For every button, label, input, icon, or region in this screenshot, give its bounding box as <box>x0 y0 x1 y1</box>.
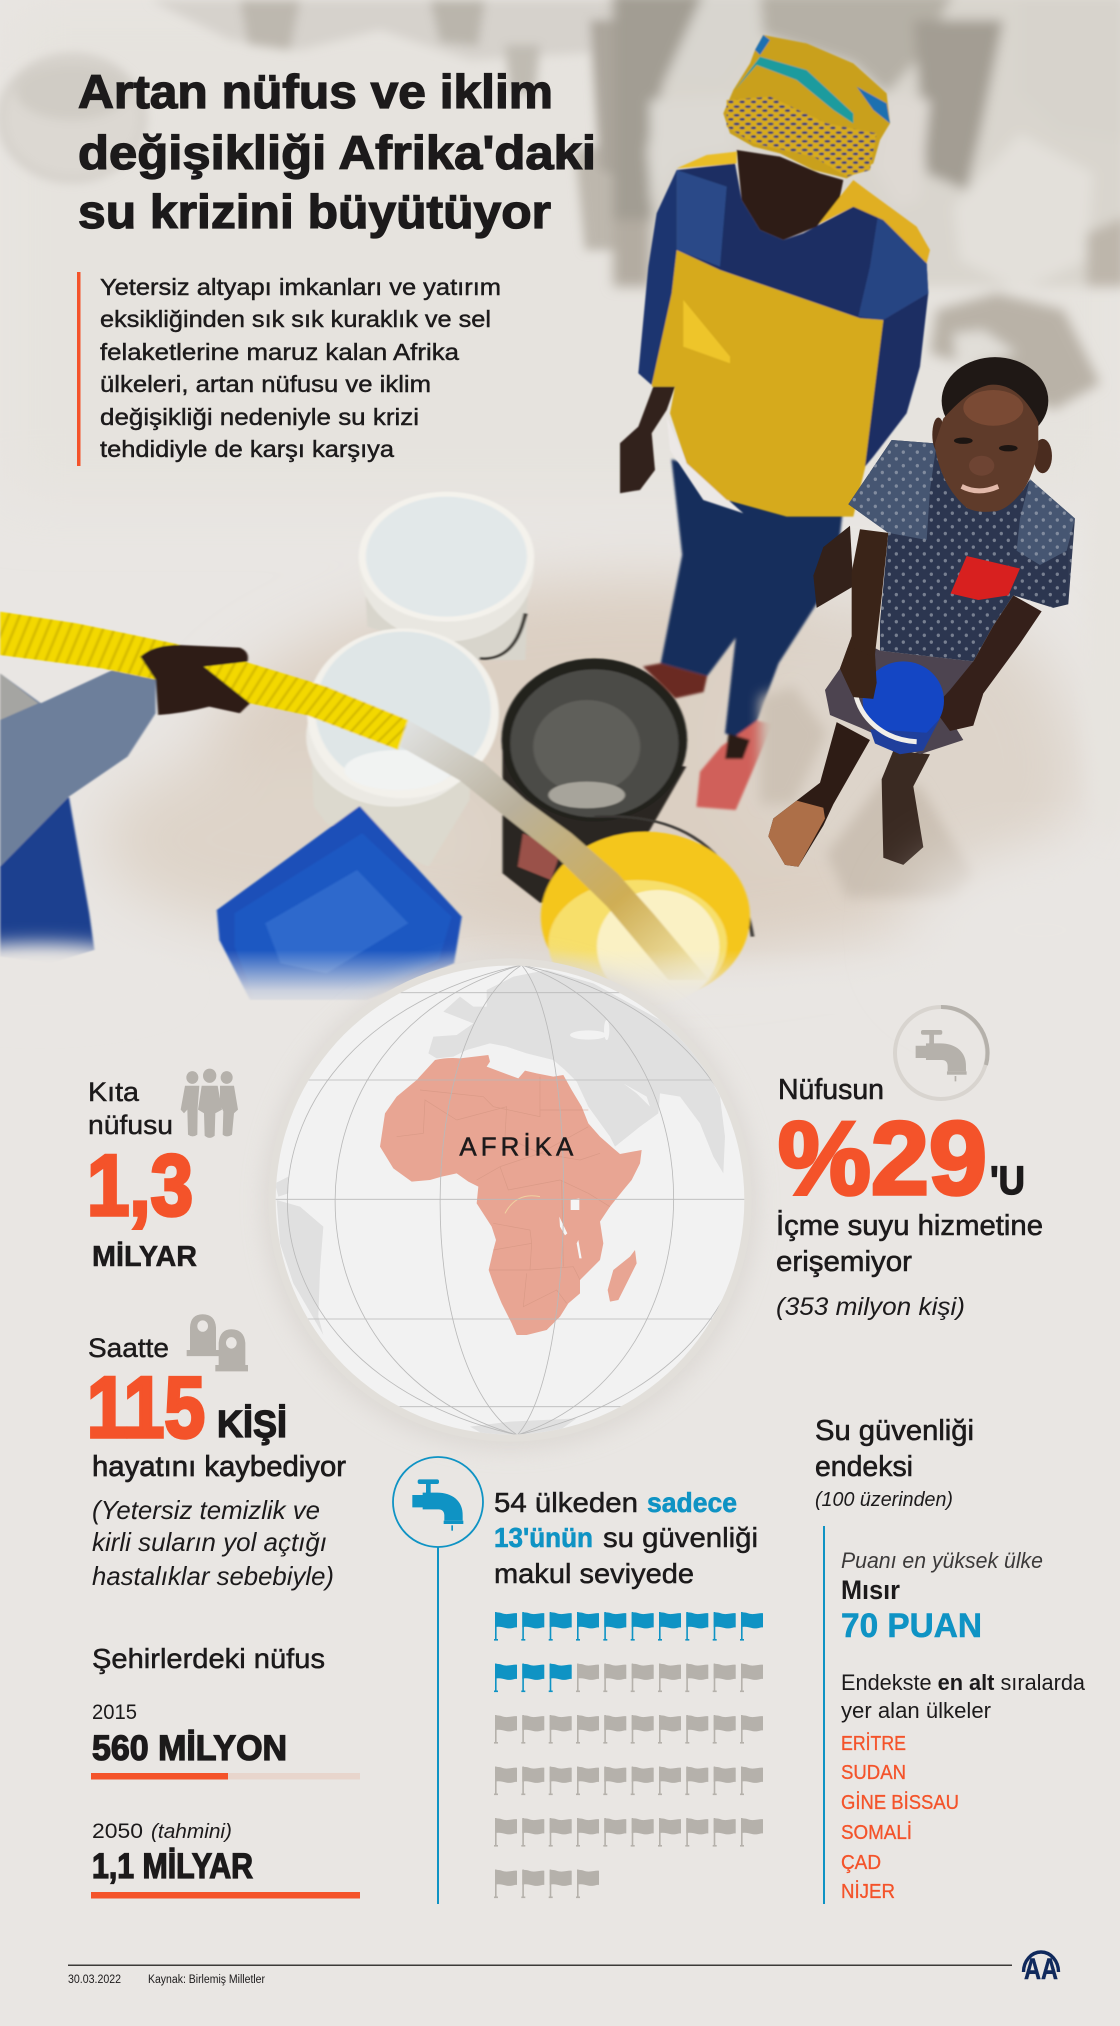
yellow bucket <box>541 816 753 1007</box>
sleeve <box>0 658 156 867</box>
list: lowest ranked countries: NİJER <box>841 1880 895 1903</box>
stat: drinking water access <box>776 1007 1043 1321</box>
woman's jeans and shoes <box>643 459 843 810</box>
left arm <box>840 529 888 699</box>
ghosted crowd, upper right <box>613 0 1120 410</box>
stat: urban population: 2015 <box>92 1701 137 1724</box>
stat: deaths per hour: KİŞİ <box>217 1404 287 1446</box>
bar: 2050 <box>91 1892 360 1898</box>
buckets, hose and man's arm <box>0 492 753 1007</box>
stat: drinking water access: %29 <box>778 1101 987 1217</box>
list: lowest ranked countries: GİNE BİSSAU <box>841 1791 959 1814</box>
globe with Africa highlighted <box>260 955 760 1452</box>
title: su krizini büyütüyor <box>78 185 551 238</box>
stat: drinking water access: İçme suyu hizmetine <box>776 1209 1043 1242</box>
panel: water security index: endeksi <box>815 1451 913 1483</box>
stat: deaths per hour <box>87 1314 346 1591</box>
stat: drinking water access: Nüfusun <box>778 1074 884 1106</box>
list: lowest ranked countries: ÇAD <box>841 1852 881 1874</box>
stat: urban population: 560 MİLYON <box>92 1729 287 1768</box>
panel: water-safe countries: su güvenliği <box>603 1522 758 1553</box>
intro paragraph: tehdidiyle de karşı karşıya <box>100 436 394 462</box>
list: lowest ranked countries: SUDAN <box>841 1762 906 1784</box>
stat: urban population <box>91 1643 360 1898</box>
boy <box>760 357 1075 897</box>
stat: drinking water access: erişemiyor <box>776 1246 912 1278</box>
shirt <box>848 440 1075 661</box>
stat: deaths per hour: (Yetersiz temizlik ve <box>92 1495 320 1525</box>
ground tone <box>0 0 1120 960</box>
panel: water-safe countries: makul seviyede <box>494 1558 694 1589</box>
stat: urban population: Şehirlerdeki nüfus <box>92 1643 325 1674</box>
stat: drinking water access: 'U <box>990 1159 1025 1203</box>
blue square bucket <box>217 806 462 1000</box>
icon: tap in progress ring <box>895 1007 988 1099</box>
stat: urban population: 1,1 MİLYAR <box>92 1847 253 1886</box>
icon: blue tap in circle <box>393 1457 483 1547</box>
grid lines <box>260 965 760 1435</box>
stat: deaths per hour: hastalıklar sebebiyle) <box>92 1561 334 1591</box>
panel: water security index: (100 üzerinden) <box>815 1489 953 1511</box>
list: lowest ranked countries <box>841 1732 959 1903</box>
yellow hose <box>0 607 418 753</box>
panel: water security index: Su güvenliği <box>815 1415 974 1447</box>
panel: water security index: yer alan ülkeler <box>841 1698 991 1723</box>
footer <box>68 1952 1058 1986</box>
land masses <box>275 970 725 1436</box>
panel: water security index: 70 PUAN <box>841 1607 982 1645</box>
intro paragraph: ülkeleri, artan nüfusu ve iklim <box>100 371 431 397</box>
intro paragraph: Yetersiz altyapı imkanları ve yatırım <box>100 274 501 300</box>
logo: AA: AA <box>1024 1953 1058 1986</box>
footer: Kaynak: Birlemiş Milletler <box>148 1974 265 1986</box>
stat: deaths per hour: 115 <box>87 1360 205 1456</box>
right arm <box>933 595 1042 731</box>
icon: two tombstones <box>187 1314 248 1371</box>
icon: three people <box>181 1069 238 1138</box>
panel: water security index: Endekste en alt sıralarda <box>841 1670 1086 1695</box>
bar: 2015 <box>91 1773 360 1780</box>
stat: urban population: 2050 <box>92 1820 143 1843</box>
intro paragraph: değişikliği nedeniyle su krizi <box>100 404 419 430</box>
stat: continent population: 1,3 <box>87 1138 193 1234</box>
legs and feet <box>768 722 870 867</box>
intro paragraph: felaketlerine maruz kalan Afrika <box>100 339 459 365</box>
white bucket middle <box>306 628 499 867</box>
stat: drinking water access: (353 milyon kişi) <box>776 1293 965 1321</box>
title: Artan nüfus ve iklim <box>78 65 553 118</box>
panel: water security index: Puanı en yüksek ülke <box>841 1548 1043 1573</box>
photo bottom fade <box>0 440 1120 1027</box>
panel: water-safe countries <box>393 1457 763 1904</box>
intro paragraph <box>77 272 501 466</box>
stat: deaths per hour: Saatte <box>88 1333 169 1363</box>
stat: deaths per hour: hayatını kaybediyor <box>92 1451 346 1483</box>
stat: urban population: (tahmini) <box>151 1821 232 1843</box>
panel: water-safe countries: 13'ünün <box>494 1522 593 1553</box>
Africa <box>380 1055 642 1335</box>
red pocket <box>951 556 1020 600</box>
footer: 30.03.2022 <box>68 1974 121 1986</box>
title: değişikliği Afrika'daki <box>78 126 596 179</box>
pictogram: 13 of 54 flags <box>494 1612 763 1898</box>
stat: continent population: Kıta <box>88 1077 140 1107</box>
title <box>78 65 596 238</box>
list: lowest ranked countries: ERİTRE <box>841 1732 906 1755</box>
photo: people collecting water from a hose <box>0 0 1120 1027</box>
stat: continent population: nüfusu <box>88 1110 173 1140</box>
stat: deaths per hour: kirli suların yol açtığı <box>92 1527 327 1557</box>
panel: water-safe countries: 54 ülkeden <box>494 1487 638 1518</box>
woman's hand <box>813 526 853 608</box>
woman: headwrap, face and sweater <box>620 35 930 517</box>
panel: water-safe countries: sadece <box>647 1487 737 1518</box>
white bucket back <box>359 492 534 660</box>
water stream <box>401 720 709 980</box>
hand holding the hose <box>140 645 250 715</box>
foot shadows <box>760 686 827 804</box>
ghosted crowd, upper left <box>0 0 700 250</box>
list: lowest ranked countries: SOMALİ <box>841 1821 912 1844</box>
intro paragraph: eksikliğinden sık sık kuraklık ve sel <box>100 306 491 332</box>
panel: water security index: Mısır <box>841 1575 900 1605</box>
blue bowl <box>863 661 944 740</box>
stat: continent population: MİLYAR <box>92 1241 197 1273</box>
shorts <box>825 636 973 754</box>
black bucket <box>502 658 687 903</box>
stat: continent population <box>87 1069 238 1273</box>
blue overalls <box>0 797 94 963</box>
label: AFRİKA: AFRİKA <box>459 1132 574 1162</box>
head <box>942 357 1048 444</box>
panel: water security index <box>815 1415 1086 1904</box>
